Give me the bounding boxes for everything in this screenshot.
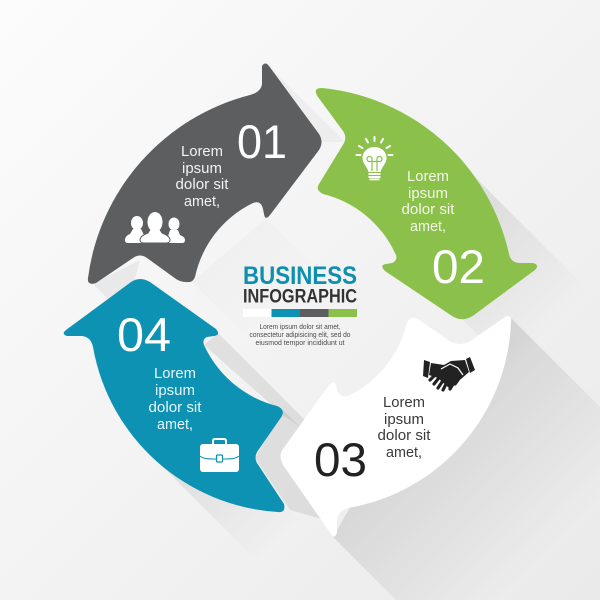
text 02: ipsum (408, 185, 448, 202)
text 03: ipsum (384, 411, 424, 428)
text 03: amet, (386, 444, 422, 461)
text 01: Lorem (181, 143, 223, 160)
description text: Lorem ipsum dolor sit amet, (260, 322, 340, 331)
text 03: Lorem (383, 394, 425, 411)
number 04: 04 (117, 308, 171, 361)
text 01: ipsum (182, 160, 222, 177)
icon: people (125, 212, 185, 243)
number 02: 02 (432, 240, 485, 293)
text 02: dolor sit (402, 201, 455, 218)
text 01 (176, 143, 229, 210)
text 04: Lorem (154, 365, 196, 382)
text 04: ipsum (155, 382, 195, 399)
text 04: dolor sit (148, 399, 202, 416)
text 02 (402, 168, 455, 235)
text 02: amet, (410, 218, 446, 235)
text 04 (148, 365, 202, 433)
text 04: amet, (157, 416, 193, 433)
text 03: dolor sit (378, 427, 431, 444)
number 01: 01 (237, 115, 287, 168)
text 01: amet, (184, 193, 220, 210)
arrow 02 panel (316, 88, 537, 319)
central title block (243, 262, 357, 347)
text 03 (378, 394, 431, 461)
heading: infographic: INFOGRAPHIC (243, 286, 357, 308)
heading: business: BUSINESS (243, 262, 357, 290)
arrow 04 panel (64, 279, 284, 512)
icon: briefcase (200, 439, 239, 472)
arrow 01 panel (88, 64, 322, 284)
text 02: Lorem (407, 168, 449, 185)
number 03: 03 (314, 433, 367, 486)
long shadows (93, 63, 600, 600)
description text: eiusmod tempor incididunt ut (256, 338, 345, 347)
description text (250, 322, 350, 347)
icon: handshake (423, 357, 475, 390)
text 01: dolor sit (176, 176, 229, 193)
colour bars (243, 309, 357, 317)
icon: light bulb (356, 137, 392, 180)
description text: consectetur adipisicing elit, sed do (250, 330, 350, 339)
arrow 03 panel (280, 316, 511, 537)
